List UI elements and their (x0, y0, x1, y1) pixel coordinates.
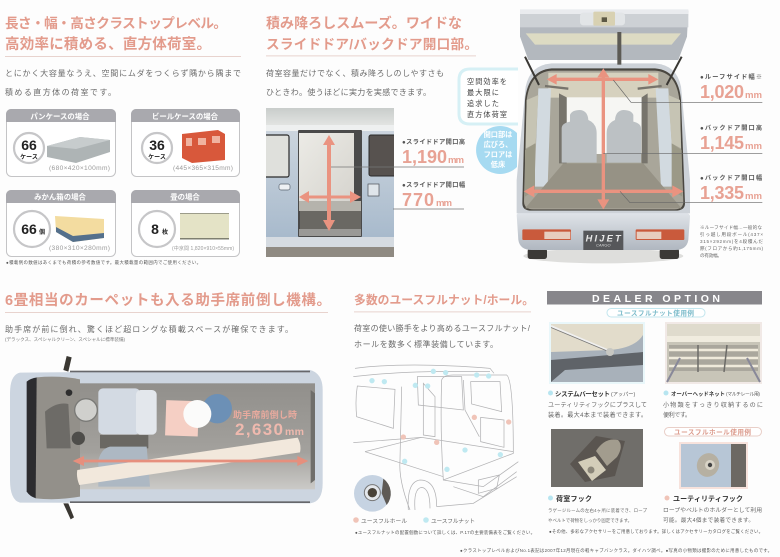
panel: beer case (131, 109, 240, 176)
left window (266, 134, 290, 178)
text block: overhead net: (マルチレール用) (726, 392, 760, 398)
panel: pan case: 66 (21, 137, 37, 153)
photo: rear view of van (517, 9, 762, 263)
callout: cuboid cargo bubble (459, 69, 518, 124)
callout: back door height: ●バックドア開口高 (700, 124, 762, 132)
bumper (517, 213, 690, 250)
text block: cargo intro (5, 68, 241, 97)
text block: roof side note (700, 224, 763, 259)
text block: overhead net: 小物類をすっきり収納するのに (663, 401, 763, 409)
heading: fold-forward seat: 6畳相当のカーペットも入る助手席前倒し機構。 (5, 291, 331, 309)
callout: slide door width: 770 (402, 190, 434, 210)
text block: nuts note: ●ユースフルナットの配置個数について詳しくは、P.17の主要装備表をご覧ください。 (355, 529, 535, 536)
callout: slide door width: ●スライドドア開口幅 (402, 181, 465, 189)
text block: footnotes: ●クラストップレベルおよびNo.1表記は2007年12月現在の軽キャブバンクラス。ダイハツ調べ。●写真の小物類は撮影のために用意したものです。 (460, 547, 772, 554)
panel: beer case: (445×365×315mm) (173, 165, 233, 172)
text block: cargo intro: とにかく大容量なうえ、空間にムダをつくらず隅から隅まで (5, 68, 241, 78)
arrow: door width (299, 191, 361, 203)
pill: useful hole examples: ユースフルホール使用例 (674, 428, 751, 436)
arrows (524, 68, 683, 209)
panel: beer case: ビールケースの場合 (152, 112, 219, 121)
inset photo: nut close-up (354, 475, 391, 512)
carpet roll (77, 438, 300, 485)
text block: roof side note: ※ルーフサイド幅…一般的な (700, 224, 762, 231)
leader lines (603, 80, 762, 203)
panel: mikan box: 66 (21, 221, 37, 237)
number plate (583, 231, 623, 250)
text block: accessory note: ●その他、多彩なアクセサリーをご用意しております。詳しくはアクセサリーカタログをご覧ください。 (549, 528, 763, 535)
photo: van top view (10, 356, 323, 519)
legend: holes and nuts: ユースフルナット (431, 518, 475, 525)
text block: fold-forward intro: 助手席が前に倒れ、驚くほど超ロングな積載スペースが確保できます。 (5, 324, 293, 334)
callout: folded length: 2,630 (235, 420, 283, 439)
panel: tatami: 8 (151, 221, 159, 237)
panel: pan case: ケース (20, 153, 38, 161)
panel: tatami (131, 190, 240, 256)
text block: doors intro (266, 68, 444, 97)
door handles (279, 184, 290, 190)
panel: pan case: パンケースの場合 (30, 112, 90, 121)
callout: cuboid cargo bubble: 最大限に (467, 88, 499, 97)
callout: slide door width (402, 181, 465, 210)
text block: nuts and holes intro (354, 323, 531, 349)
text block: system bar set: 装着。最大4本まで装着できます。 (548, 411, 647, 419)
photo: rear view of van: CARGO (596, 243, 611, 248)
callout: back door width: mm (745, 191, 762, 202)
folded seats (98, 388, 140, 434)
callout: low floor circle: 広びろ、 (484, 140, 512, 149)
text block: overhead net (663, 390, 763, 419)
heading: doors (266, 15, 478, 52)
text block: cargo hook (548, 494, 648, 524)
text block: system bar set: (アッパー) (611, 391, 635, 398)
photo: sliding door (260, 108, 399, 257)
door opening (298, 130, 362, 237)
callout: back door width (700, 174, 762, 203)
pill: useful nut examples: ユースフルナット使用例 (617, 308, 694, 318)
callout: low floor circle (476, 126, 517, 174)
pink square (165, 400, 199, 437)
text block: system bar set (548, 390, 647, 419)
text block: doors intro: 荷室容量だけでなく、積み降ろしのしやすさも (266, 68, 444, 78)
callout: slide door height: 1,190 (402, 147, 447, 167)
text block: roof side note: 315×292mm)を4段積んだ (700, 238, 763, 245)
text block: cargo intro: 積める直方体の荷室です。 (5, 87, 116, 97)
text block: nuts and holes intro: ホールを数多く標準装備しています。 (354, 339, 498, 349)
pill: useful hole examples (664, 428, 762, 436)
panel: tatami: 畳の場合 (170, 192, 200, 202)
pill: useful nut examples (607, 308, 705, 318)
callout: folded length (233, 409, 304, 439)
text block: system bar set: システムバーセット (555, 390, 610, 398)
callout: back door height: mm (745, 141, 762, 152)
text block: fold-forward intro (5, 324, 293, 343)
callout: low floor circle: 低床 (491, 160, 506, 169)
white circle (183, 400, 211, 428)
panel: tatami: (中京間 1,820×910×55mm) (172, 245, 234, 252)
text block: cargo hook: やベルトで荷物をしっかり固定できます。 (548, 517, 632, 524)
callout: slide door width: mm (436, 198, 452, 209)
text block: roof side note: 引っ越し用段ボール(437× (700, 231, 763, 238)
panel: beer case: 36 (149, 137, 165, 153)
text block: overhead net: オーバーヘッドネット (671, 390, 725, 398)
hatch door (520, 11, 688, 60)
text block: load note: ●積載例の数値はあくまでも荷積の参考数値です。最大積載量の範囲内でご使用ください。 (6, 259, 201, 266)
heading: cargo size: 高効率に積める、直方体荷室。 (5, 35, 211, 53)
text block: system bar set: ユーティリティフックにプラスして (548, 402, 647, 409)
callout: low floor circle: 開口部は (484, 130, 512, 139)
text block: roof side note: 際(フロアから約1,175mm) (700, 245, 763, 252)
banner: dealer option (547, 291, 762, 305)
photo: system bar set (549, 322, 645, 384)
panel: beer case: ケース (148, 153, 166, 161)
text block: roof side note: の有効幅。 (700, 252, 722, 259)
floor (525, 163, 682, 208)
text block: fold-forward intro: (デラックス、スペシャルクリーン、スペシャルに標準装備) (5, 336, 125, 343)
callout: low floor circle: フロアは (484, 150, 512, 159)
callout: back door height (700, 124, 762, 153)
text block: utility hook: ユーティリティフック (673, 494, 743, 503)
callout: roof side width: ●ルーフサイド幅※ (700, 73, 762, 81)
text block: cargo hook: ラゲージルームの左右4ヶ所に装着でき、ロープ (548, 507, 648, 514)
arrow: seat folded length (73, 456, 308, 466)
callout: cuboid cargo bubble: 直方体荷室 (467, 110, 507, 119)
callout: slide door height: mm (448, 155, 464, 166)
diagram: van outline with nut and hole positions (353, 365, 518, 512)
photo: overhead net (665, 322, 762, 384)
callout: roof side width (700, 73, 762, 102)
leader lines: door labels (394, 167, 464, 209)
pillars (534, 88, 551, 187)
text block: overhead net: 便利です。 (663, 411, 691, 419)
text block: cargo hook: 荷室フック (556, 494, 592, 503)
panel: mikan box (6, 190, 116, 256)
panel: tatami: 枚 (162, 228, 168, 236)
arrow: door height (323, 135, 335, 231)
seats (562, 110, 597, 163)
heading: doors: スライドドア/バックドア開口部。 (266, 37, 478, 52)
heading: useful nuts and holes: 多数のユースフルナット/ホール。 (354, 293, 534, 307)
panel: pan case (6, 109, 116, 176)
photo: rear view of van: HIJET (586, 233, 622, 243)
text block: utility hook (663, 494, 762, 524)
heading: cargo size: 長さ・幅・高さクラストップレベル。 (5, 15, 227, 31)
callout: back door width: ●バックドア開口幅 (700, 174, 762, 182)
callout: slide door height (402, 138, 465, 167)
callout: folded length: 助手席前倒し時 (233, 409, 297, 420)
callout: roof side width: 1,020 (700, 82, 744, 102)
banner: dealer option: DEALER OPTION (592, 293, 720, 305)
legend: holes and nuts: ユースフルホール (361, 518, 407, 525)
text block: nuts and holes intro: 荷室の使い勝手をより高めるユースフルナット/ (354, 323, 531, 333)
legend: holes and nuts (353, 517, 475, 525)
photo: utility hook (679, 442, 748, 489)
right window (368, 134, 394, 176)
callout: cuboid cargo bubble: 空間効率を (467, 77, 507, 86)
leader lines (329, 167, 394, 209)
callout: slide door height: ●スライドドア開口高 (402, 138, 465, 146)
callout: folded length: mm (285, 426, 304, 438)
panel: pan case: (680×420×100mm) (49, 165, 110, 172)
heading: cargo size (5, 15, 227, 53)
panel: mikan box: 個 (39, 228, 45, 236)
text block: doors intro: ひときわ。使うほどに実力を実感できます。 (266, 87, 431, 97)
callout: back door width: 1,335 (700, 183, 744, 203)
heading: doors: 積み降ろしスムーズ。ワイドな (266, 15, 462, 31)
text block: utility hook: 可能。最大4個まで装着できます。 (663, 516, 754, 524)
callout: cuboid cargo bubble: 追求した (467, 99, 499, 108)
callout: back door height: 1,145 (700, 133, 744, 153)
panel: mikan box: (380×310×280mm) (49, 245, 110, 252)
text block: utility hook: ロープやベルトのホルダーとして利用 (663, 506, 762, 514)
blue circle (203, 394, 232, 423)
photo: cargo hook (551, 429, 643, 487)
panel: mikan box: みかん箱の場合 (34, 192, 86, 202)
callout: roof side width: mm (745, 90, 762, 101)
